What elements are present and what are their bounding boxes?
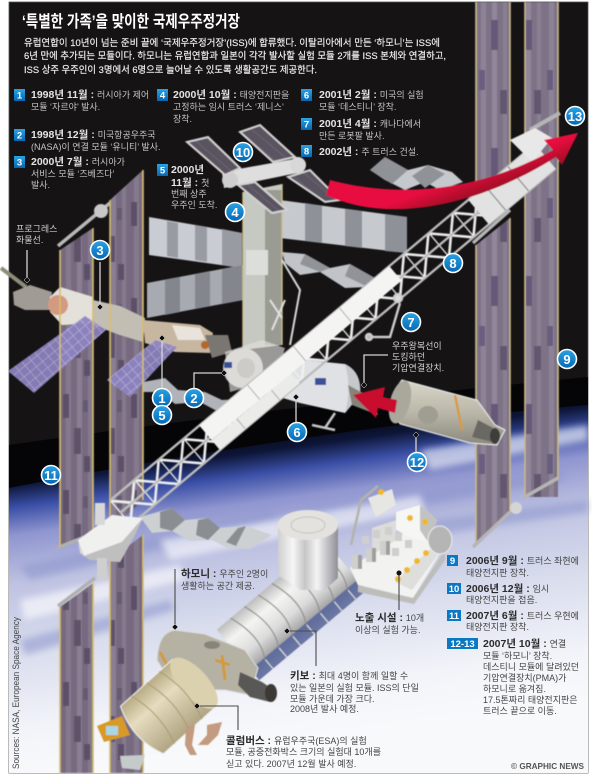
timeline item 11 bbox=[447, 609, 579, 632]
big red arrow bbox=[326, 133, 578, 209]
upper solar panels P6 bbox=[187, 125, 340, 213]
astronauts bbox=[185, 722, 222, 755]
badge numbers: 13 bbox=[568, 109, 582, 124]
title: ‘특별한 가족’을 맞이한 국제우주정거장 bbox=[22, 12, 240, 31]
timeline item 7: 7 bbox=[304, 120, 309, 130]
timeline item 9 bbox=[447, 554, 579, 578]
label: Harmony bbox=[181, 567, 268, 591]
Unity node bbox=[223, 340, 285, 392]
timeline item 11: 2007년 6월 : 트러스 우현에 bbox=[466, 609, 579, 622]
intro text bbox=[24, 37, 446, 76]
main truss bbox=[110, 144, 555, 525]
timeline item 10: 2006년 12월 : 임시 bbox=[466, 582, 549, 595]
credit: Graphic News: © GRAPHIC NEWS bbox=[511, 761, 584, 771]
solar arrays: left pair bbox=[57, 170, 143, 773]
Columbus module bbox=[97, 650, 226, 770]
timeline item 6: 2001년 2월 : 미국의 실험 bbox=[319, 88, 424, 101]
label: exposed facility: 이상의 실험 가능. bbox=[355, 625, 420, 635]
badge numbers: 6 bbox=[293, 425, 301, 440]
badge numbers: 2 bbox=[190, 391, 198, 406]
timeline item 3: 서비스 모듈 ‘즈베즈다’ bbox=[31, 169, 115, 179]
timeline item 6: 6 bbox=[304, 90, 309, 102]
timeline item 12-13: 하모니로 옮겨짐. bbox=[483, 684, 546, 694]
timeline item 1 bbox=[14, 88, 149, 112]
badge numbers: 3 bbox=[96, 243, 104, 258]
timeline item 12-13: 데스티니 모듈에 달려있던 bbox=[483, 661, 579, 672]
label: docking adapter: 우주왕복선이 bbox=[392, 341, 442, 351]
timeline item 10 bbox=[447, 582, 549, 605]
label: Progress: 프로그레스 bbox=[16, 224, 57, 234]
Kibo module bbox=[217, 540, 366, 680]
badge numbers: 7 bbox=[407, 315, 415, 330]
timeline item 7 bbox=[301, 117, 421, 141]
modules: Progress, Zvezda, Zarya bbox=[1, 268, 232, 358]
badge numbers: 4 bbox=[231, 205, 239, 220]
solar arrays: right pair bbox=[473, 2, 558, 547]
timeline item 12-13: 트러스 끝으로 이동. bbox=[483, 706, 557, 716]
intro text: 유럽연합이 10년이 넘는 준비 끝에 ‘국제우주정거장’(ISS)에 합류했다. 이탈리아에서 만든 ‘하모니’는 ISS에 bbox=[24, 37, 440, 49]
timeline item 4: 4 bbox=[160, 90, 166, 102]
timeline item 12-13: 2007년 10월 : 연결 bbox=[483, 637, 566, 650]
timeline item 5: 우주인 도착. bbox=[171, 200, 217, 210]
timeline item 10: 태양전지판을 접음. bbox=[466, 594, 537, 605]
callout leader lines bbox=[24, 250, 419, 730]
badge numbers: 12 bbox=[410, 455, 424, 470]
label: Progress: 화물선. bbox=[16, 235, 43, 245]
label: Columbus: 싣고 있다. 2007년 12월 발사 예정. bbox=[226, 758, 356, 769]
credit: sources: Sources: NASA, European Space Agency bbox=[11, 616, 21, 769]
label: exposed facility: 노출 시설 : 10개 bbox=[355, 612, 424, 624]
label: Harmony: 생활하는 공간 제공. bbox=[181, 580, 255, 591]
timeline item 3: 발사. bbox=[31, 180, 50, 190]
label: Kibo: 있는 일본의 실험 모듈. ISS의 단일 bbox=[290, 682, 419, 693]
label: docking adapter bbox=[392, 341, 444, 373]
label: Kibo: 2008년 발사 예정. bbox=[290, 704, 359, 714]
intro text: 6년 만에 추가되는 모듈이다. 하모니는 유럽연합과 일본이 각각 발사할 실험 모듈 2개를 ISS 본체와 연결하고, bbox=[24, 50, 446, 62]
timeline item 7: 2001년 4월 : 캐나다에서 bbox=[319, 117, 421, 130]
timeline item 3 bbox=[14, 155, 125, 190]
badge numbers: 5 bbox=[158, 408, 166, 423]
timeline item 9: 2006년 9월 : 트러스 좌현에 bbox=[466, 554, 579, 567]
timeline item 1: 1998년 11월 : 러시아가 제어 bbox=[31, 88, 149, 101]
label: Harmony: 하모니 : 우주인 2명이 bbox=[181, 567, 268, 580]
small red arrow bbox=[353, 387, 397, 418]
label: Columbus bbox=[226, 735, 381, 769]
truss end and port arm bbox=[510, 113, 560, 162]
label: docking adapter: 도킹하던 bbox=[392, 351, 425, 362]
timeline item 5 bbox=[157, 163, 217, 210]
timeline item 6 bbox=[301, 88, 424, 112]
radiators bbox=[140, 157, 463, 549]
badge numbers bbox=[44, 109, 582, 483]
badge numbers: 10 bbox=[236, 145, 250, 160]
badge numbers: 11 bbox=[44, 468, 58, 483]
timeline item 9: 태양전지판 장착. bbox=[466, 568, 529, 578]
label: exposed facility bbox=[355, 612, 424, 635]
label: docking adapter: 기압연결장치. bbox=[392, 362, 444, 373]
label: Kibo: 키보 : 최대 4명이 함께 일할 수 bbox=[290, 669, 408, 682]
timeline item 7: 만든 로봇팔 발사. bbox=[319, 130, 384, 141]
label: Columbus: 콜럼버스 : 유럽우주국(ESA)의 실험 bbox=[226, 735, 367, 747]
timeline item 5: 11월 : 첫 bbox=[171, 176, 209, 189]
timeline item 8: 2002년 : 주 트러스 건설. bbox=[319, 145, 419, 158]
timeline item 11: 11 bbox=[449, 611, 460, 622]
label: Columbus: 모듈, 공중전화박스 크기의 실험대 10개를 bbox=[226, 747, 381, 757]
Destiny module bbox=[262, 360, 378, 430]
timeline item 2 bbox=[14, 128, 160, 152]
timeline item 5: 5 bbox=[160, 166, 166, 176]
intro text: ISS 상주 우주인이 3명에서 6명으로 늘어날 수 있도록 생활공간도 제공한다. bbox=[24, 64, 317, 76]
timeline item 12-13: 12-13 bbox=[450, 639, 475, 650]
timeline item 5: 번째 상주 bbox=[171, 189, 207, 199]
logistics cylinder bbox=[278, 510, 338, 590]
label: Kibo bbox=[290, 669, 419, 714]
Harmony module detail bbox=[157, 630, 277, 702]
timeline item 8: 8 bbox=[304, 146, 309, 158]
timeline item 1: 1 bbox=[17, 90, 23, 102]
label: Kibo: 모듈 가운데 가장 크다. bbox=[290, 694, 375, 704]
timeline item 3: 2000년 7월 : 러시아가 bbox=[31, 155, 125, 168]
timeline item 4 bbox=[157, 88, 289, 124]
timeline item 2: 2 bbox=[17, 130, 22, 142]
timeline item 12-13 bbox=[447, 637, 579, 716]
timeline item 3: 3 bbox=[17, 158, 22, 168]
timeline item 5: 2000년 bbox=[171, 163, 204, 176]
exposed facility bbox=[350, 486, 452, 604]
badge numbers: 8 bbox=[449, 256, 457, 271]
timeline item 1: 모듈 ‘자르야’ 발사. bbox=[31, 102, 100, 112]
robot arm Canadarm bbox=[366, 294, 402, 340]
timeline item 6: 모듈 ‘데스티니’ 장착. bbox=[319, 102, 396, 112]
new Harmony module in orbit bbox=[385, 378, 505, 445]
truss foot node bbox=[78, 503, 143, 580]
timeline item 4: 고정하는 임시 트러스 ‘제니스’ bbox=[173, 101, 284, 112]
timeline item 12-13: 기압연결장치(PMA)가 bbox=[483, 672, 566, 683]
number badges on the station bbox=[42, 106, 584, 484]
timeline item 9: 9 bbox=[450, 556, 455, 567]
timeline item 4: 2000년 10월 : 태양전지판을 bbox=[173, 88, 289, 101]
timeline item 2: 1998년 12월 : 미국항공우주국 bbox=[31, 128, 156, 141]
label: Progress bbox=[16, 224, 57, 245]
timeline item 10: 10 bbox=[449, 584, 459, 595]
timeline item 12-13: 모듈 ‘하모니’ 장착. bbox=[483, 651, 552, 661]
earth limb and clouds bbox=[9, 377, 588, 773]
central tower module bbox=[243, 184, 300, 350]
badge numbers: 9 bbox=[563, 352, 571, 367]
timeline item 4: 장착. bbox=[173, 114, 192, 124]
Russian solar wings bbox=[8, 170, 177, 773]
timeline item 11: 태양전지판 장착. bbox=[466, 622, 529, 632]
badge numbers: 1 bbox=[158, 391, 166, 406]
timeline item 2: (NASA)이 연결 모듈 ‘유니티’ 발사. bbox=[31, 142, 160, 152]
timeline item 12-13: 17.5톤짜리 태양전지판은 bbox=[483, 695, 578, 705]
